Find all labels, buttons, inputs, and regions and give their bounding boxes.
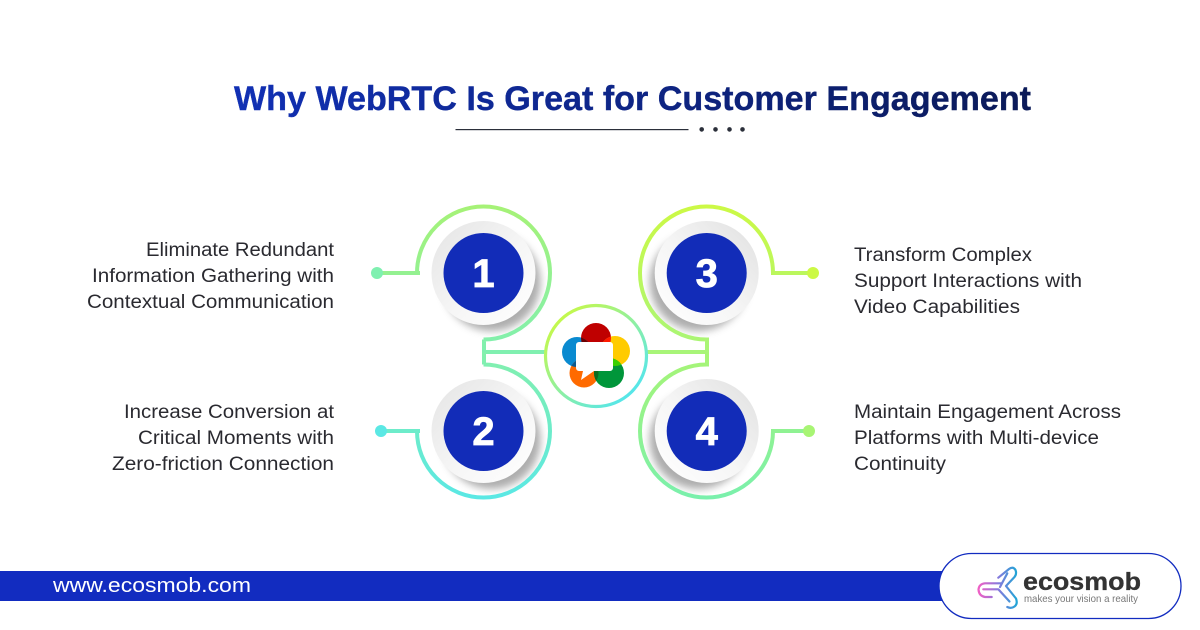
number badge 2 [432,379,540,489]
text: step 2 [112,402,335,475]
tagline: makes your vision a reality [1024,593,1139,605]
number badge 2: 2 [472,410,495,454]
text: step 1: Eliminate Redundant [146,240,335,261]
number badge 1 [432,221,540,331]
step 4 connector ring [640,352,815,498]
text: step 1: Contextual Communication [87,292,334,313]
title: Why WebRTC Is Great for Customer Engagement [234,80,1031,118]
text: step 4: Maintain Engagement Across [854,402,1121,423]
logo mark [978,568,1017,608]
footer bar [0,571,950,601]
number badge 4 [650,379,759,489]
step 1 connector ring [371,206,550,352]
number badge 3: 3 [696,252,718,296]
website url: www.ecosmob.com [52,575,251,597]
text: step 3: Transform Complex [854,245,1033,266]
number badge 1: 1 [472,252,495,296]
step 2 connector ring [375,352,550,498]
text: step 1 [87,240,335,313]
text: step 1: Information Gathering with [92,266,334,287]
step 3 connector ring [640,206,819,352]
text: step 3 [854,245,1082,318]
title divider with dots [456,127,745,132]
text: step 2: Critical Moments with [138,428,334,449]
ecosmob logo badge [939,554,1181,618]
center WebRTC logo [546,306,646,406]
number badge 3 [650,221,759,331]
text: step 3: Support Interactions with [854,271,1082,292]
text: step 2: Zero-friction Connection [112,454,334,475]
text: step 4: Continuity [854,454,947,475]
number badge 4: 4 [696,410,719,454]
text: step 4 [854,402,1121,475]
wordmark: ecosmob [1023,568,1141,596]
text: step 2: Increase Conversion at [124,402,335,423]
text: step 3: Video Capabilities [854,297,1020,318]
text: step 4: Platforms with Multi-device [854,428,1099,449]
